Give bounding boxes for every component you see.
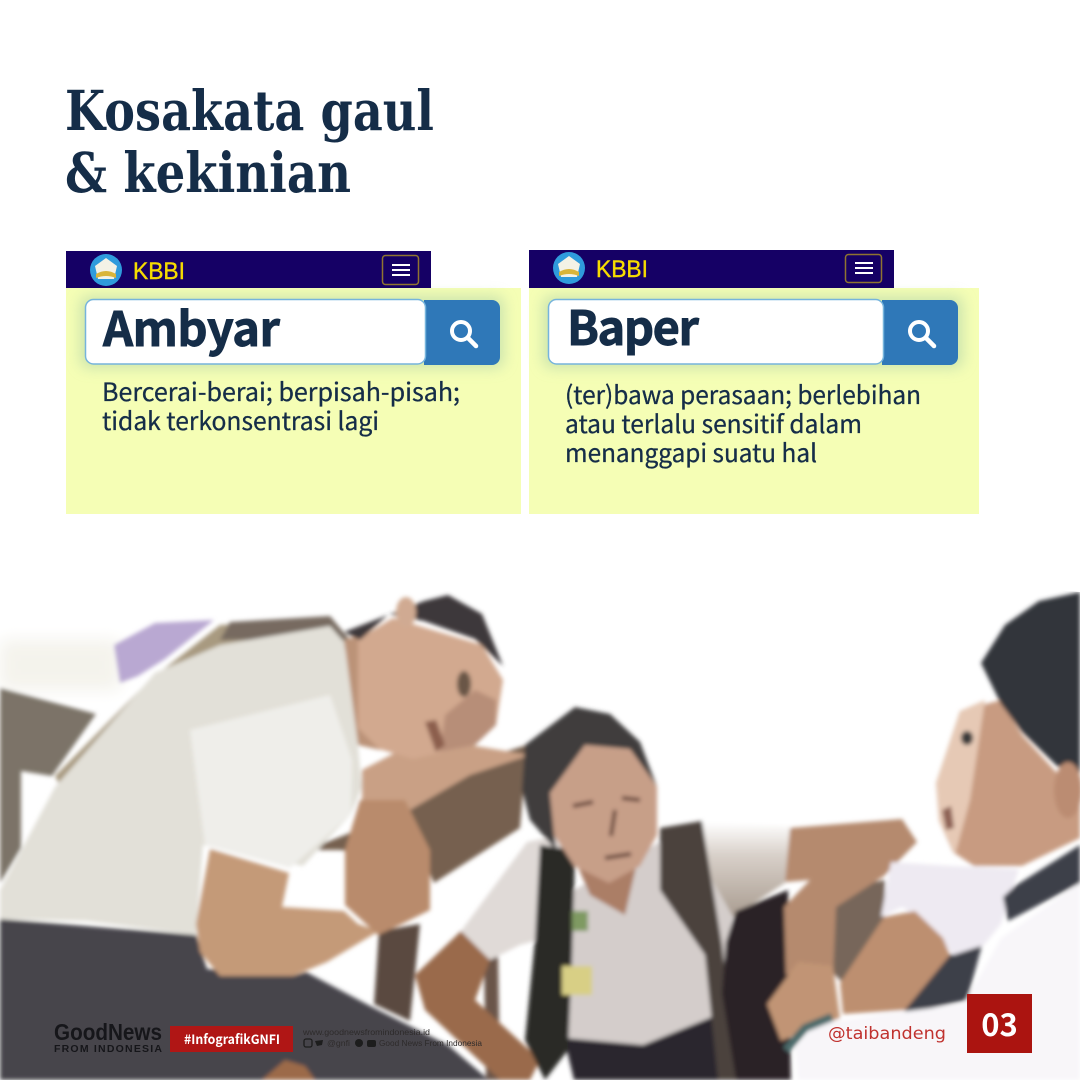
right student cheek light bbox=[936, 700, 985, 855]
page number: 03 bbox=[981, 1000, 1018, 1045]
middle student shirt bbox=[564, 825, 733, 1045]
word: Baper: Baper bbox=[567, 290, 700, 359]
left student lips bbox=[425, 720, 445, 752]
left student knee skin bbox=[262, 1060, 315, 1080]
desk left bbox=[0, 688, 96, 883]
background light haze bbox=[0, 640, 120, 690]
right student face bbox=[936, 700, 1080, 866]
left student arm bbox=[196, 849, 379, 976]
brown wood right bbox=[830, 880, 885, 985]
middle student neck bbox=[576, 866, 638, 916]
definition: Baper bbox=[565, 376, 921, 470]
left student hair tail bbox=[55, 618, 360, 790]
left student hair dark bbox=[220, 616, 350, 640]
definition: Ambyar: Bercerai-berai; berpisah-pisah; bbox=[102, 373, 460, 409]
search button bbox=[882, 300, 958, 365]
KBBI navy header bbox=[529, 250, 894, 288]
yellow card background bbox=[66, 288, 521, 514]
KBBI navy header bbox=[66, 251, 431, 288]
middle student sleeve with wall shadow bbox=[702, 822, 790, 917]
panel: Baper dictionary card bbox=[529, 250, 979, 514]
middle student left arm bbox=[415, 931, 540, 1080]
word: Ambyar: Ambyar bbox=[102, 291, 280, 360]
left student ear bbox=[396, 597, 416, 627]
middle student face bbox=[550, 745, 657, 883]
middle student eyes and nose shadow bbox=[573, 798, 640, 858]
KBBI navy header: KBBI bbox=[596, 256, 648, 283]
right student lips bbox=[942, 806, 954, 830]
definition: Ambyar bbox=[102, 373, 460, 438]
middle student braid bbox=[525, 845, 575, 1080]
footer: GoodNews logo: FROM INDONESIA bbox=[54, 1043, 162, 1055]
right student ear bbox=[1054, 762, 1080, 818]
right student hair bbox=[981, 592, 1080, 773]
right student fist bbox=[767, 962, 840, 1041]
right student dark skirt bbox=[905, 945, 982, 1014]
hashtag badge bbox=[170, 1026, 293, 1052]
left student hair top bbox=[344, 595, 503, 666]
website and social handles: @gnfi bbox=[327, 1038, 350, 1048]
KBBI navy header: KBBI bbox=[133, 258, 185, 285]
desk leg bbox=[374, 924, 420, 1021]
hashtag badge: #InfografikGNFI bbox=[184, 1029, 280, 1048]
right student collar bbox=[1003, 845, 1080, 921]
search button bbox=[424, 300, 500, 365]
middle student sleeve left bbox=[461, 835, 575, 960]
website and social handles: www.goodnewsfromindonesia.id bbox=[302, 1027, 430, 1037]
backpack bbox=[722, 890, 791, 1080]
definition: Ambyar: tidak terkonsentrasi lagi bbox=[102, 402, 379, 438]
left student skirt bbox=[0, 919, 489, 1080]
left sleeve highlight bbox=[190, 695, 352, 868]
left student shirt bbox=[0, 626, 362, 935]
definition: Baper: atau terlalu sensitif dalam bbox=[565, 405, 862, 441]
search box glow bbox=[543, 296, 963, 368]
footer: GoodNews logo: GoodNews bbox=[54, 1019, 162, 1045]
middle student raised arm bbox=[784, 819, 917, 975]
left student hands bbox=[345, 800, 430, 935]
title: & kekinian bbox=[65, 140, 351, 205]
green school logo bbox=[572, 911, 588, 931]
middle student hair bbox=[522, 707, 657, 850]
yellow card background bbox=[529, 288, 979, 514]
backpack strap bbox=[660, 821, 736, 1080]
photo: three students in uniform at school desks bbox=[0, 592, 1080, 1080]
footer: GoodNews logo bbox=[54, 1019, 162, 1055]
left student forearm up to head bbox=[359, 742, 527, 812]
left student face bbox=[358, 618, 503, 759]
name badge bbox=[562, 966, 592, 995]
right student arm bbox=[840, 911, 950, 1014]
left student eye bbox=[457, 671, 471, 697]
definition: Baper: (ter)bawa perasaan; berlebihan bbox=[565, 376, 921, 412]
title: Kosakata gaul bbox=[65, 78, 434, 143]
right student body bbox=[795, 883, 1080, 1080]
author credit: @taibandeng bbox=[828, 1024, 946, 1044]
definition: Baper: menanggapi suatu hal bbox=[565, 434, 817, 470]
wrist band bbox=[786, 1017, 832, 1050]
wooden desk centre bbox=[306, 745, 527, 883]
title bbox=[65, 78, 434, 205]
page number bbox=[967, 994, 1032, 1053]
middle student skirt bbox=[564, 1017, 736, 1080]
panel: Ambyar dictionary card bbox=[66, 251, 521, 514]
left student face shadow bbox=[440, 690, 496, 752]
right student sleeve bbox=[881, 862, 1019, 955]
right student eye bbox=[961, 731, 973, 745]
left student neck bbox=[342, 634, 381, 752]
search box glow bbox=[80, 296, 504, 368]
desk frame right bbox=[484, 950, 500, 1080]
purple bag bbox=[114, 620, 214, 683]
search input bbox=[86, 300, 426, 364]
search input bbox=[548, 300, 884, 364]
website and social handles: Good News From Indonesia bbox=[379, 1038, 482, 1048]
website and social handles bbox=[302, 1027, 482, 1048]
